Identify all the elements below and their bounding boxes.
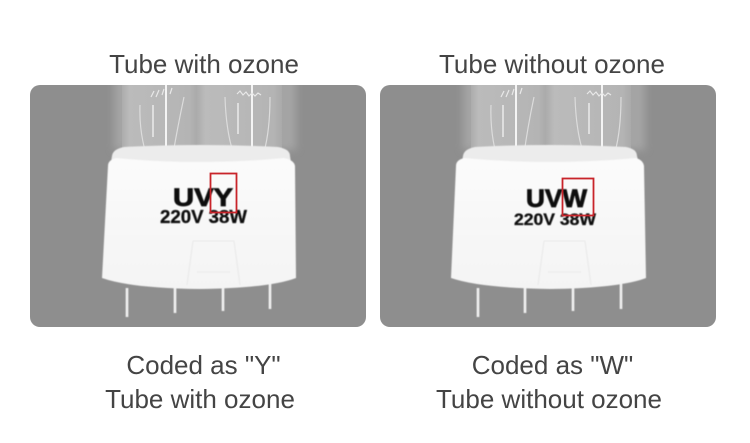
caption: coded as Y (105, 350, 295, 414)
label text (160, 187, 248, 224)
heading: tube with ozone: Tube with ozone (109, 49, 299, 79)
label text: UVY (173, 184, 233, 212)
label text: 220V 38W (160, 207, 247, 227)
label text: 220V 38W (514, 210, 597, 229)
photo: tube coded W (380, 75, 716, 327)
red highlight box (562, 178, 594, 216)
caption: coded as Y: Tube with ozone (105, 384, 295, 414)
caption: coded as W: Coded as "W" (472, 350, 633, 380)
label text: UVW (526, 185, 587, 213)
red highlight box (210, 174, 236, 212)
white base (102, 145, 296, 317)
label text (514, 188, 597, 226)
heading: tube without ozone: Tube without ozone (439, 49, 665, 79)
caption: coded as W (436, 350, 662, 414)
photo: tube coded Y (30, 75, 366, 327)
photo panels (30, 85, 716, 327)
caption: coded as Y: Coded as "Y" (126, 350, 281, 380)
glass tubes (112, 85, 298, 151)
caption: coded as W: Tube without ozone (436, 384, 662, 414)
white base (451, 145, 646, 317)
glass tubes (462, 85, 646, 151)
